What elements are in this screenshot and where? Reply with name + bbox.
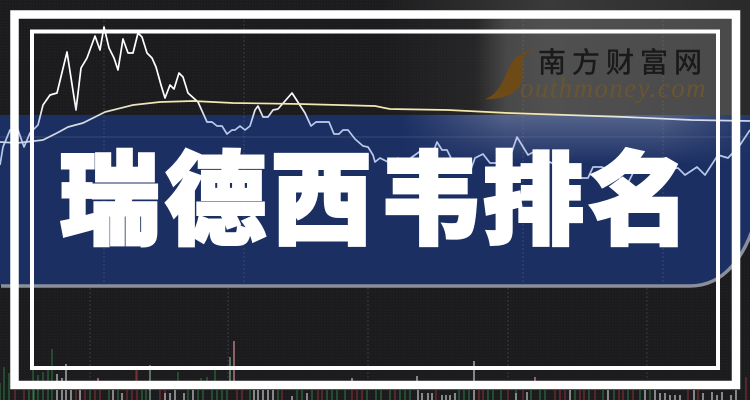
logo Chinese name: 南方财富网 <box>538 47 708 78</box>
volume bars <box>0 341 746 400</box>
outer grey glow band <box>380 0 750 118</box>
price line chart <box>0 27 750 183</box>
navy banner <box>0 115 750 285</box>
green volume bars <box>0 349 650 400</box>
grey glow behind logo <box>380 18 732 118</box>
logo: 南方财富网 southmoney.com <box>485 47 708 103</box>
banner lower border <box>1 222 750 286</box>
red volume bars <box>15 370 746 400</box>
logo url: outhmoney.com <box>520 73 707 103</box>
banner highlight <box>416 115 750 158</box>
logo swoosh S <box>485 48 542 99</box>
pink volume bars <box>98 341 535 381</box>
white volume bars <box>57 361 736 400</box>
inner white frame <box>32 32 718 368</box>
pale green tall volume bar <box>150 357 230 400</box>
moving average line <box>0 101 750 143</box>
title: 瑞德西韦排名 <box>59 146 690 258</box>
